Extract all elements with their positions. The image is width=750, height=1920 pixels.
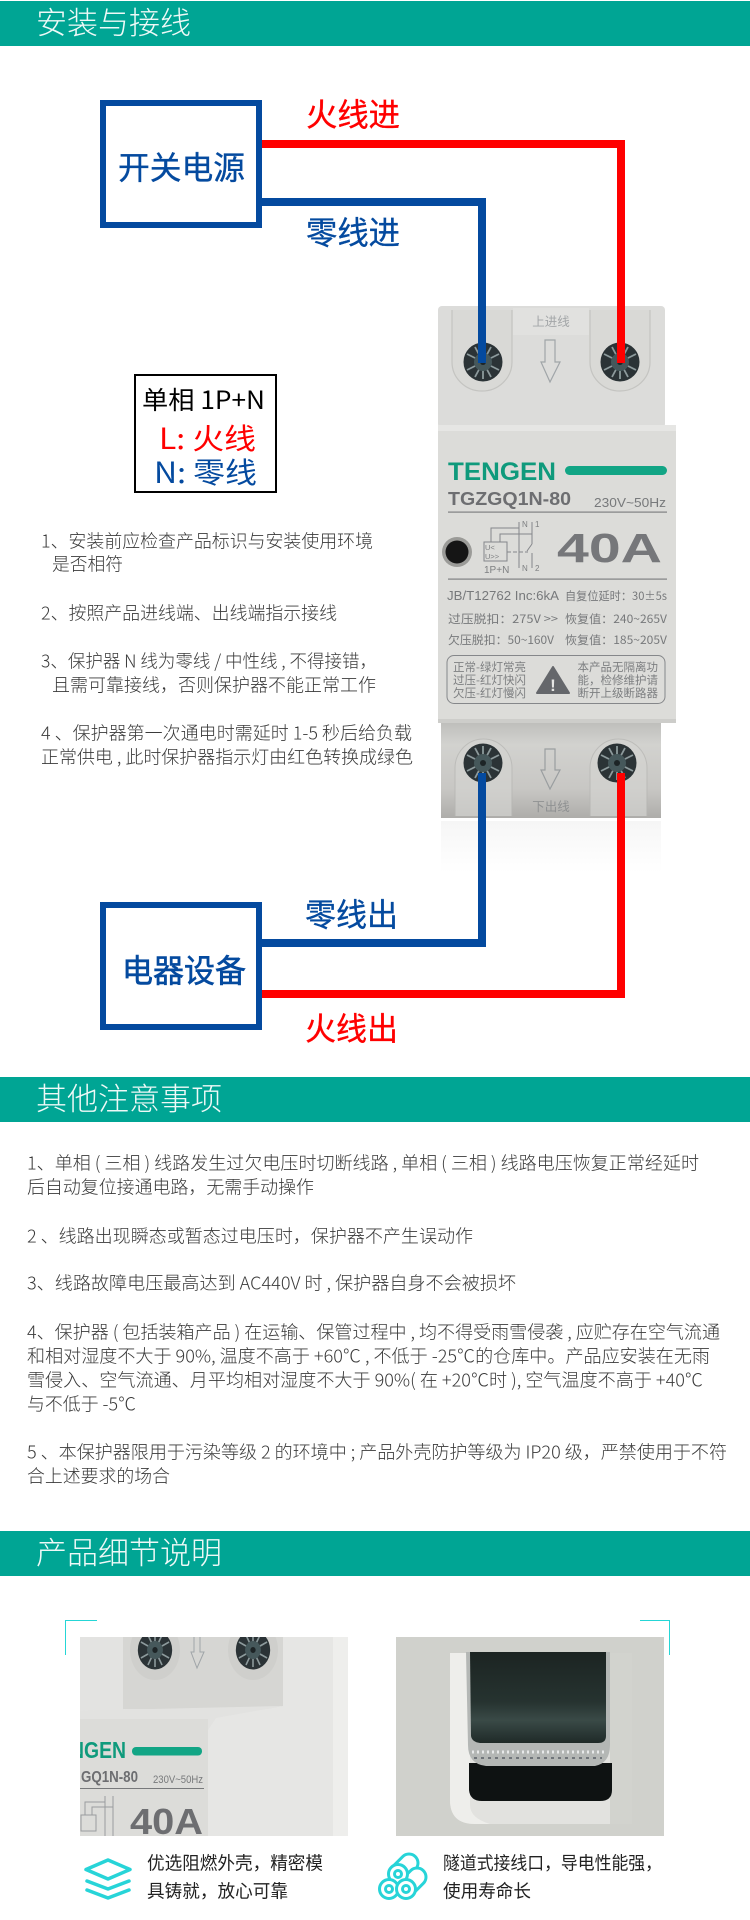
device: surge protector product photo: N: [522, 520, 528, 529]
device: surge protector product photo: 上进线: [532, 311, 570, 330]
device: surge protector product photo: TENGEN: [448, 458, 556, 486]
installation instructions: 3、保护器 N 线为零线 / 中性线 , 不得接错，: [41, 648, 377, 674]
device: surge protector product photo: 断开上级断路器: [578, 685, 658, 701]
device: surge protector product photo: 能，检修维护请: [578, 672, 658, 688]
photo: tunnel wiring port detail: [396, 1637, 664, 1836]
other notes text: 3、线路故障电压最高达到 AC440V 时 , 保护器自身不会被损坏: [27, 1270, 516, 1296]
other notes text: 和相对湿度不大于 90%, 温度不高于 +60℃ , 不低于 -25℃的仓库中。产品应安装在无雨: [27, 1342, 710, 1368]
photo: product casing detail: NGEN: [70, 1737, 126, 1763]
other notes text: 雪侵入、空气流通、月平均相对湿度不大于 90%( 在 +20℃时 ), 空气温度不高于 +40℃: [27, 1366, 703, 1392]
section 1 header: [0, 0, 750, 46]
photo: product casing detail: [80, 1637, 348, 1836]
installation instructions: 4 、保护器第一次通电时需延时 1-5 秒后给负载: [41, 720, 412, 746]
section 2 header: [0, 1074, 750, 1122]
device: surge protector product photo: 1P+N: [484, 565, 509, 576]
device: surge protector product photo: 过压-红灯快闪: [453, 672, 526, 688]
appliance box with output wires: 电器设备: [122, 946, 246, 992]
installation instructions: 是否相符: [52, 550, 123, 576]
section 3 header: [0, 1528, 750, 1576]
photo: product casing detail: 40A: [130, 1801, 203, 1842]
section 3 header: 产品细节说明: [36, 1528, 222, 1573]
device: surge protector product photo: N: [522, 564, 528, 573]
label: neutral out: 零线出: [305, 890, 398, 936]
appliance box with output wires: [103, 773, 621, 1027]
device: surge protector product photo: 恢复值：185~205V: [565, 632, 667, 648]
other notes text: [27, 1150, 727, 1488]
label: live out: 火线出: [305, 1004, 398, 1050]
label: live in: 火线进: [306, 90, 400, 136]
caption: tunnel port: [443, 1850, 662, 1904]
other notes text: 合上述要求的场合: [27, 1462, 170, 1488]
device: surge protector product photo: U>>: [485, 552, 500, 561]
device: surge protector product photo: 过压脱扣：275V >>: [448, 611, 558, 627]
device: surge protector product photo: U<: [485, 543, 495, 552]
device: surge protector product photo: 欠压脱扣：50~160V: [448, 632, 554, 648]
other notes text: 与不低于 -5℃: [27, 1390, 136, 1416]
corner bracket right: [640, 1620, 670, 1655]
caption: tunnel port: 使用寿命长: [443, 1878, 531, 1904]
device: surge protector product photo: 1: [535, 520, 540, 529]
device: surge protector product photo: 下出线: [532, 796, 570, 815]
device: surge protector product photo: 恢复值：240~265V: [565, 611, 667, 627]
icon: layers: [86, 1860, 130, 1898]
power source box with input wires: [103, 103, 621, 363]
installation instructions: 正常供电 , 此时保护器指示灯由红色转换成绿色: [41, 744, 413, 770]
device: surge protector product photo: 40A: [557, 525, 662, 571]
other notes text: 4、保护器 ( 包括装箱产品 ) 在运输、保管过程中 , 均不得受雨雪侵袭 , 应贮存在空气流通: [27, 1318, 720, 1344]
legend box: N: 零线: [154, 450, 257, 492]
installation instructions: 2、按照产品进线端、出线端指示接线: [41, 600, 337, 626]
section 2 header: 其他注意事项: [36, 1074, 222, 1119]
photo: product casing detail: GQ1N-80: [81, 1769, 138, 1786]
device: surge protector product photo: 230V~50Hz: [594, 495, 666, 510]
legend box: [135, 375, 276, 492]
legend box: L: 火线: [159, 416, 256, 458]
other notes text: 1、单相 ( 三相 ) 线路发生过欠电压时切断线路 , 单相 ( 三相 ) 线路电压恢复正常经延时: [27, 1150, 699, 1176]
device: surge protector product photo: 2: [535, 564, 540, 573]
device: surge protector product photo: 欠压-红灯慢闪: [453, 685, 526, 701]
device: surge protector product photo: !: [550, 676, 556, 695]
icon: rolls: [380, 1863, 417, 1898]
other notes text: 2 、线路出现瞬态或暂态过电压时，保护器不产生误动作: [27, 1222, 473, 1248]
other notes text: 后自动复位接通电路，无需手动操作: [27, 1174, 314, 1200]
label: neutral in: 零线进: [306, 208, 400, 254]
device: surge protector product photo: 自复位延时：30±5s: [565, 588, 667, 604]
caption: casing: 具铸就，放心可靠: [147, 1878, 288, 1904]
installation instructions: [41, 528, 413, 770]
corner bracket left: [66, 1620, 97, 1655]
photo: product casing detail: 230V~50Hz: [153, 1774, 203, 1786]
installation instructions: 1、安装前应检查产品标识与安装使用环境: [41, 528, 373, 554]
caption: casing: 优选阻燃外壳，精密模: [147, 1850, 323, 1876]
device: surge protector product photo: 正常-绿灯常亮: [453, 659, 526, 675]
installation instructions: 且需可靠接线，否则保护器不能正常工作: [52, 672, 376, 698]
legend box: 单相 1P+N: [142, 381, 265, 417]
caption: tunnel port: 隧道式接线口，导电性能强，: [443, 1850, 662, 1876]
device: surge protector product photo: 本产品无隔离功: [578, 659, 658, 675]
device: surge protector product photo: TGZGQ1N-80: [448, 489, 571, 509]
device: surge protector product photo: JB/T12762 Inc:6kA: [447, 588, 559, 603]
power source box with input wires: 开关电源: [118, 143, 245, 189]
caption: casing: [147, 1850, 323, 1904]
other notes text: 5 、本保护器限用于污染等级 2 的环境中 ; 产品外壳防护等级为 IP20 级，严禁使用于不符: [27, 1438, 727, 1464]
device: surge protector product photo: [438, 306, 676, 873]
